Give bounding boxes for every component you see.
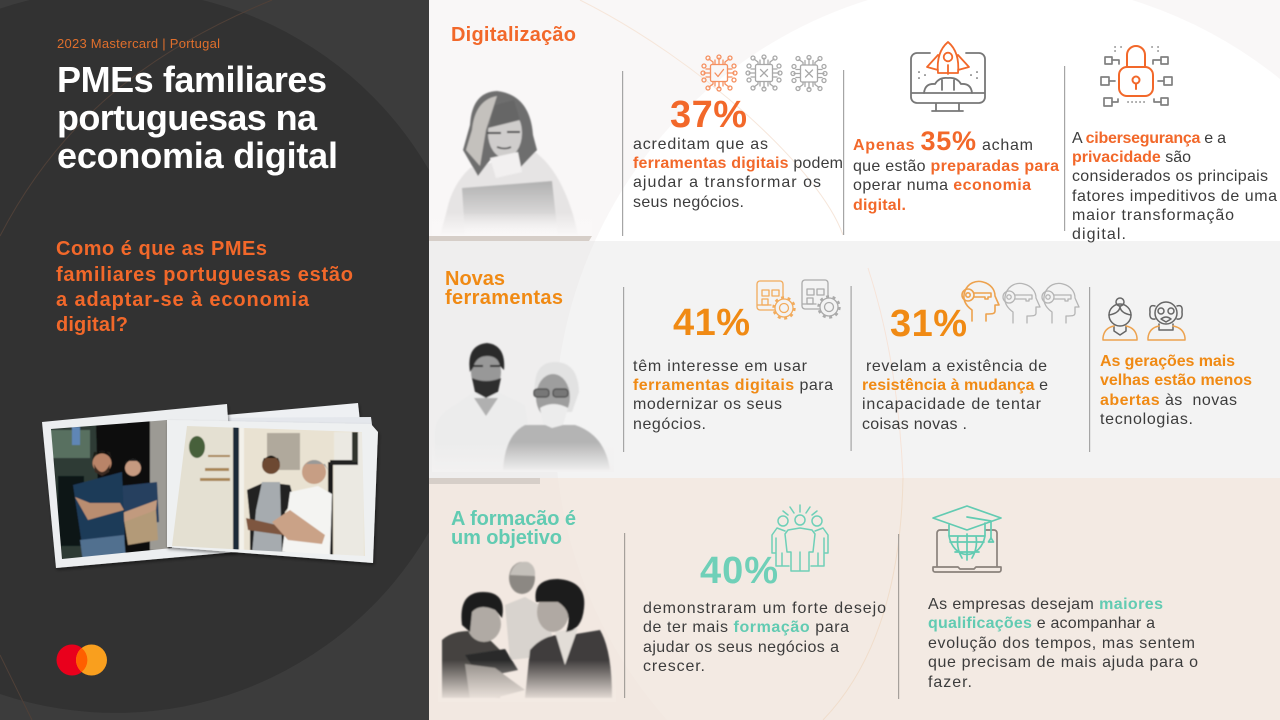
text block: ferramentas digitais: [633, 136, 843, 211]
text block: maiores qualificações: As empresas desejam maiores: [928, 596, 1163, 613]
text block: 35% prepared: [853, 126, 1059, 214]
text block: older generations: [1100, 353, 1252, 428]
text block: cibersegurança: maior transformação: [1072, 207, 1234, 224]
icon: chips 1 of 3 highlighted: [701, 55, 827, 92]
icon: padlock with network nodes: [1101, 46, 1172, 106]
section heading: [451, 508, 576, 549]
text block: maiores qualificações: qualificações e acompanhar a: [928, 615, 1155, 632]
stat: 41%: 41%: [673, 302, 750, 344]
divider 1: [622, 71, 623, 236]
text block: older generations: tecnologias.: [1100, 411, 1193, 428]
photo: two men: [432, 343, 614, 472]
divider 1: [624, 533, 625, 698]
icon: heads with keys: [962, 281, 1079, 323]
photo: woman with laptop: [432, 91, 592, 236]
text block: formação: de ter mais formação para: [643, 619, 849, 636]
divider 2: [898, 534, 899, 699]
section heading: Novas: [445, 268, 505, 290]
eyebrow label: 2023 Mastercard | Portugal: [57, 36, 220, 51]
text block: formação: ajudar os seus negócios a: [643, 639, 839, 656]
photo: three people with tablet: [438, 562, 616, 702]
text block: resistência à mudança: resistência à mudança e: [862, 377, 1048, 394]
subtitle question: digital?: [56, 314, 128, 336]
stat: 40%: 40%: [700, 550, 778, 592]
text block: 35% prepared: que estão preparadas para: [853, 158, 1059, 175]
subtitle question: a adaptar-se à economia: [56, 289, 310, 311]
text block: formação: [643, 600, 886, 675]
icon: team of three: [772, 505, 828, 571]
text block: formação: crescer.: [643, 658, 705, 675]
text block: maiores qualificações: fazer.: [928, 674, 972, 691]
text block: cibersegurança: privacidade são: [1072, 149, 1191, 166]
section heading: ferramentas: [445, 287, 563, 309]
text block: ferramentas digitais: modernizar os seus: [633, 396, 782, 413]
divider 1: [623, 287, 624, 452]
text block: formação: demonstraram um forte desejo: [643, 600, 886, 617]
text block: ferramentas digitais: ajudar a transformar os: [633, 174, 821, 191]
section heading: [445, 268, 563, 309]
text block: ferramentas digitais: [633, 358, 833, 433]
bar accent: [429, 478, 540, 484]
text block: resistência à mudança: revelam a existência de: [866, 358, 1047, 375]
text block: ferramentas digitais: acreditam que as: [633, 136, 768, 153]
text block: 35% prepared: Apenas 35% acham: [853, 126, 1033, 156]
stat: 31%: 31%: [890, 303, 967, 345]
title: economia digital: [57, 135, 338, 176]
bar accent: [429, 236, 592, 241]
panel: Digitalização section: [429, 0, 1280, 243]
panel: Novas ferramentas section: [429, 241, 1280, 484]
text block: ferramentas digitais: têm interesse em usar: [633, 358, 808, 375]
section heading: Digitalização: [451, 24, 576, 46]
text block: resistência à mudança: [862, 358, 1048, 433]
text block: cibersegurança: A cibersegurança e a: [1072, 130, 1226, 147]
text block: maiores qualificações: evolução dos tempos, mas sentem: [928, 635, 1195, 652]
text block: ferramentas digitais: negócios.: [633, 416, 706, 433]
divider 3: [1064, 66, 1065, 231]
text block: maiores qualificações: [928, 596, 1198, 691]
title: PMEs familiares: [57, 59, 327, 100]
text block: ferramentas digitais: seus negócios.: [633, 194, 744, 211]
section heading: A formacão é: [451, 508, 576, 530]
icon: graduation cap on laptop: [933, 506, 1001, 572]
divider 2: [843, 70, 844, 235]
text block: older generations: abertas às novas: [1100, 392, 1237, 409]
stat: 37%: 37%: [670, 94, 747, 136]
panel: A formação section: [429, 478, 1280, 720]
text block: 35% prepared: digital.: [853, 197, 906, 214]
text block: ferramentas digitais: ferramentas digitais podem: [633, 155, 843, 172]
photo stack: family business owners: [42, 403, 378, 568]
text block: cibersegurança: fatores impeditivos de uma: [1072, 188, 1277, 205]
text block: older generations: As gerações mais: [1100, 353, 1235, 370]
text block: resistência à mudança: coisas novas .: [862, 416, 967, 433]
subtitle question: Como é que as PMEs: [56, 238, 267, 260]
text block: maiores qualificações: que precisam de mais ajuda para o: [928, 654, 1198, 671]
title: portuguesas na: [57, 97, 318, 138]
icon: older woman and older man: [1103, 298, 1185, 340]
title: [57, 59, 338, 176]
divider 2: [850, 286, 852, 451]
section heading: um objetivo: [451, 527, 562, 549]
subtitle question: familiares portuguesas estão: [56, 264, 353, 286]
logo: Mastercard: [56, 644, 107, 676]
icon: phone with gear, 2 units: [757, 280, 840, 318]
text block: 35% prepared: operar numa economia: [853, 177, 1031, 194]
subtitle question: [56, 238, 353, 336]
text block: cibersegurança: considerados os principais: [1072, 168, 1268, 185]
icon: rocket launching from monitor: [911, 42, 985, 111]
text block: cibersegurança: digital.: [1072, 226, 1126, 243]
text block: ferramentas digitais: ferramentas digitais para: [633, 377, 833, 394]
text block: resistência à mudança: incapacidade de tentar: [862, 396, 1042, 413]
divider 3: [1089, 287, 1090, 452]
panel: dark sidebar: [0, 0, 429, 720]
text block: cibersegurança: [1072, 130, 1277, 243]
text block: older generations: velhas estão menos: [1100, 372, 1252, 389]
